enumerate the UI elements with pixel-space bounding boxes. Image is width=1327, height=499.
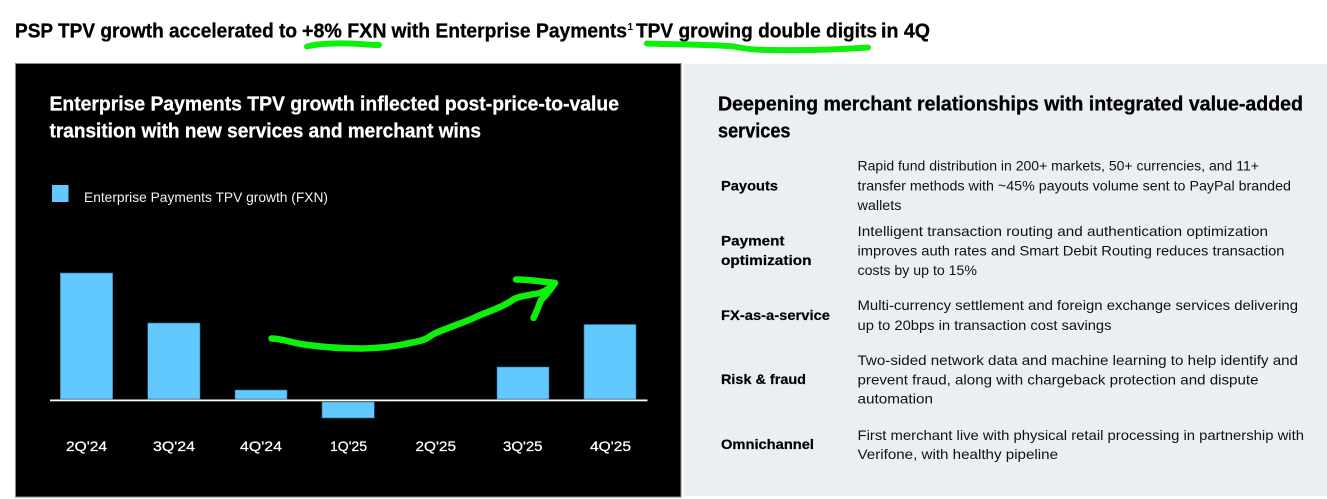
- row: Omnichannel: [721, 427, 1304, 462]
- row: Payment optimization: costs by up to 15%: [858, 262, 977, 278]
- bar chart: 3Q'24: [153, 438, 195, 454]
- bar chart: [50, 273, 648, 454]
- row: Risk & fraud: Risk & fraud: [721, 371, 806, 387]
- arrow: growth trend: [272, 280, 555, 348]
- bar chart: 4Q'24: [240, 438, 282, 454]
- row: Payouts: wallets: [856, 197, 902, 213]
- highlight underline: TPV growing double digits: [647, 44, 868, 50]
- title: +8% FXN: [302, 20, 386, 42]
- row: Payouts: Payouts: [721, 178, 778, 194]
- highlight underline: +8% FXN: [307, 43, 379, 46]
- row: Risk & fraud: prevent fraud, along with chargeback protection and dispute: [858, 372, 1259, 388]
- panel heading: right: services: [718, 120, 790, 142]
- row: Payouts: [721, 158, 1291, 213]
- row: Payouts: Rapid fund distribution in 200+ markets, 50+ currencies, and 11+: [858, 158, 1259, 174]
- row: FX-as-a-service: up to 20bps in transaction cost savings: [858, 317, 1112, 333]
- legend: Enterprise Payments TPV growth (FXN): [84, 189, 328, 205]
- title: TPV growing double digits: [636, 20, 877, 42]
- title: [15, 20, 930, 42]
- bar chart: 4Q'25: [590, 438, 631, 454]
- title: in 4Q: [881, 20, 930, 42]
- bar chart: 2Q'24: [66, 438, 107, 454]
- panel heading: right: Deepening merchant relationships with integrated value-added: [718, 94, 1303, 116]
- panel: value-added services: [684, 64, 1327, 496]
- row: Payment optimization: improves auth rates and Smart Debit Routing reduces transaction: [858, 242, 1284, 258]
- row: Omnichannel: First merchant live with physical retail processing in partnership with: [858, 427, 1304, 443]
- legend: [52, 185, 328, 205]
- row: FX-as-a-service: [721, 297, 1298, 333]
- row: Risk & fraud: Two-sided network data and machine learning to help identify and: [858, 352, 1298, 368]
- row: FX-as-a-service: Multi-currency settlement and foreign exchange services delivering: [858, 297, 1298, 313]
- title: PSP TPV growth accelerated to: [15, 20, 297, 42]
- bar chart: 2Q'25: [416, 438, 456, 454]
- panel heading: left: transition with new services and merchant wins: [50, 120, 481, 142]
- row: Payouts: transfer methods with ~45% payouts volume sent to PayPal branded: [858, 178, 1291, 194]
- row: Risk & fraud: automation: [858, 390, 933, 406]
- panel: enterprise payments chart: [16, 64, 681, 497]
- panel heading: left: Enterprise Payments TPV growth inflected post-price-to-value: [50, 94, 619, 116]
- bar chart: 3Q'25: [503, 438, 543, 454]
- panel heading: right: [718, 94, 1303, 142]
- bar chart: 1Q'25: [330, 438, 367, 454]
- row: Payment optimization: [721, 223, 1284, 278]
- title: with Enterprise Payments: [391, 20, 627, 42]
- row: Payment optimization: optimization: [721, 252, 812, 268]
- title: 1: [628, 22, 634, 33]
- row: Payment optimization: Payment: [721, 232, 785, 248]
- panel heading: left: [50, 94, 619, 142]
- row: FX-as-a-service: FX-as-a-service: [721, 307, 830, 323]
- row: Omnichannel: Verifone, with healthy pipeline: [858, 446, 1058, 462]
- row: Risk & fraud: [721, 352, 1298, 406]
- row: Omnichannel: Omnichannel: [721, 436, 814, 452]
- row: Payment optimization: Intelligent transaction routing and authentication optimization: [858, 223, 1268, 239]
